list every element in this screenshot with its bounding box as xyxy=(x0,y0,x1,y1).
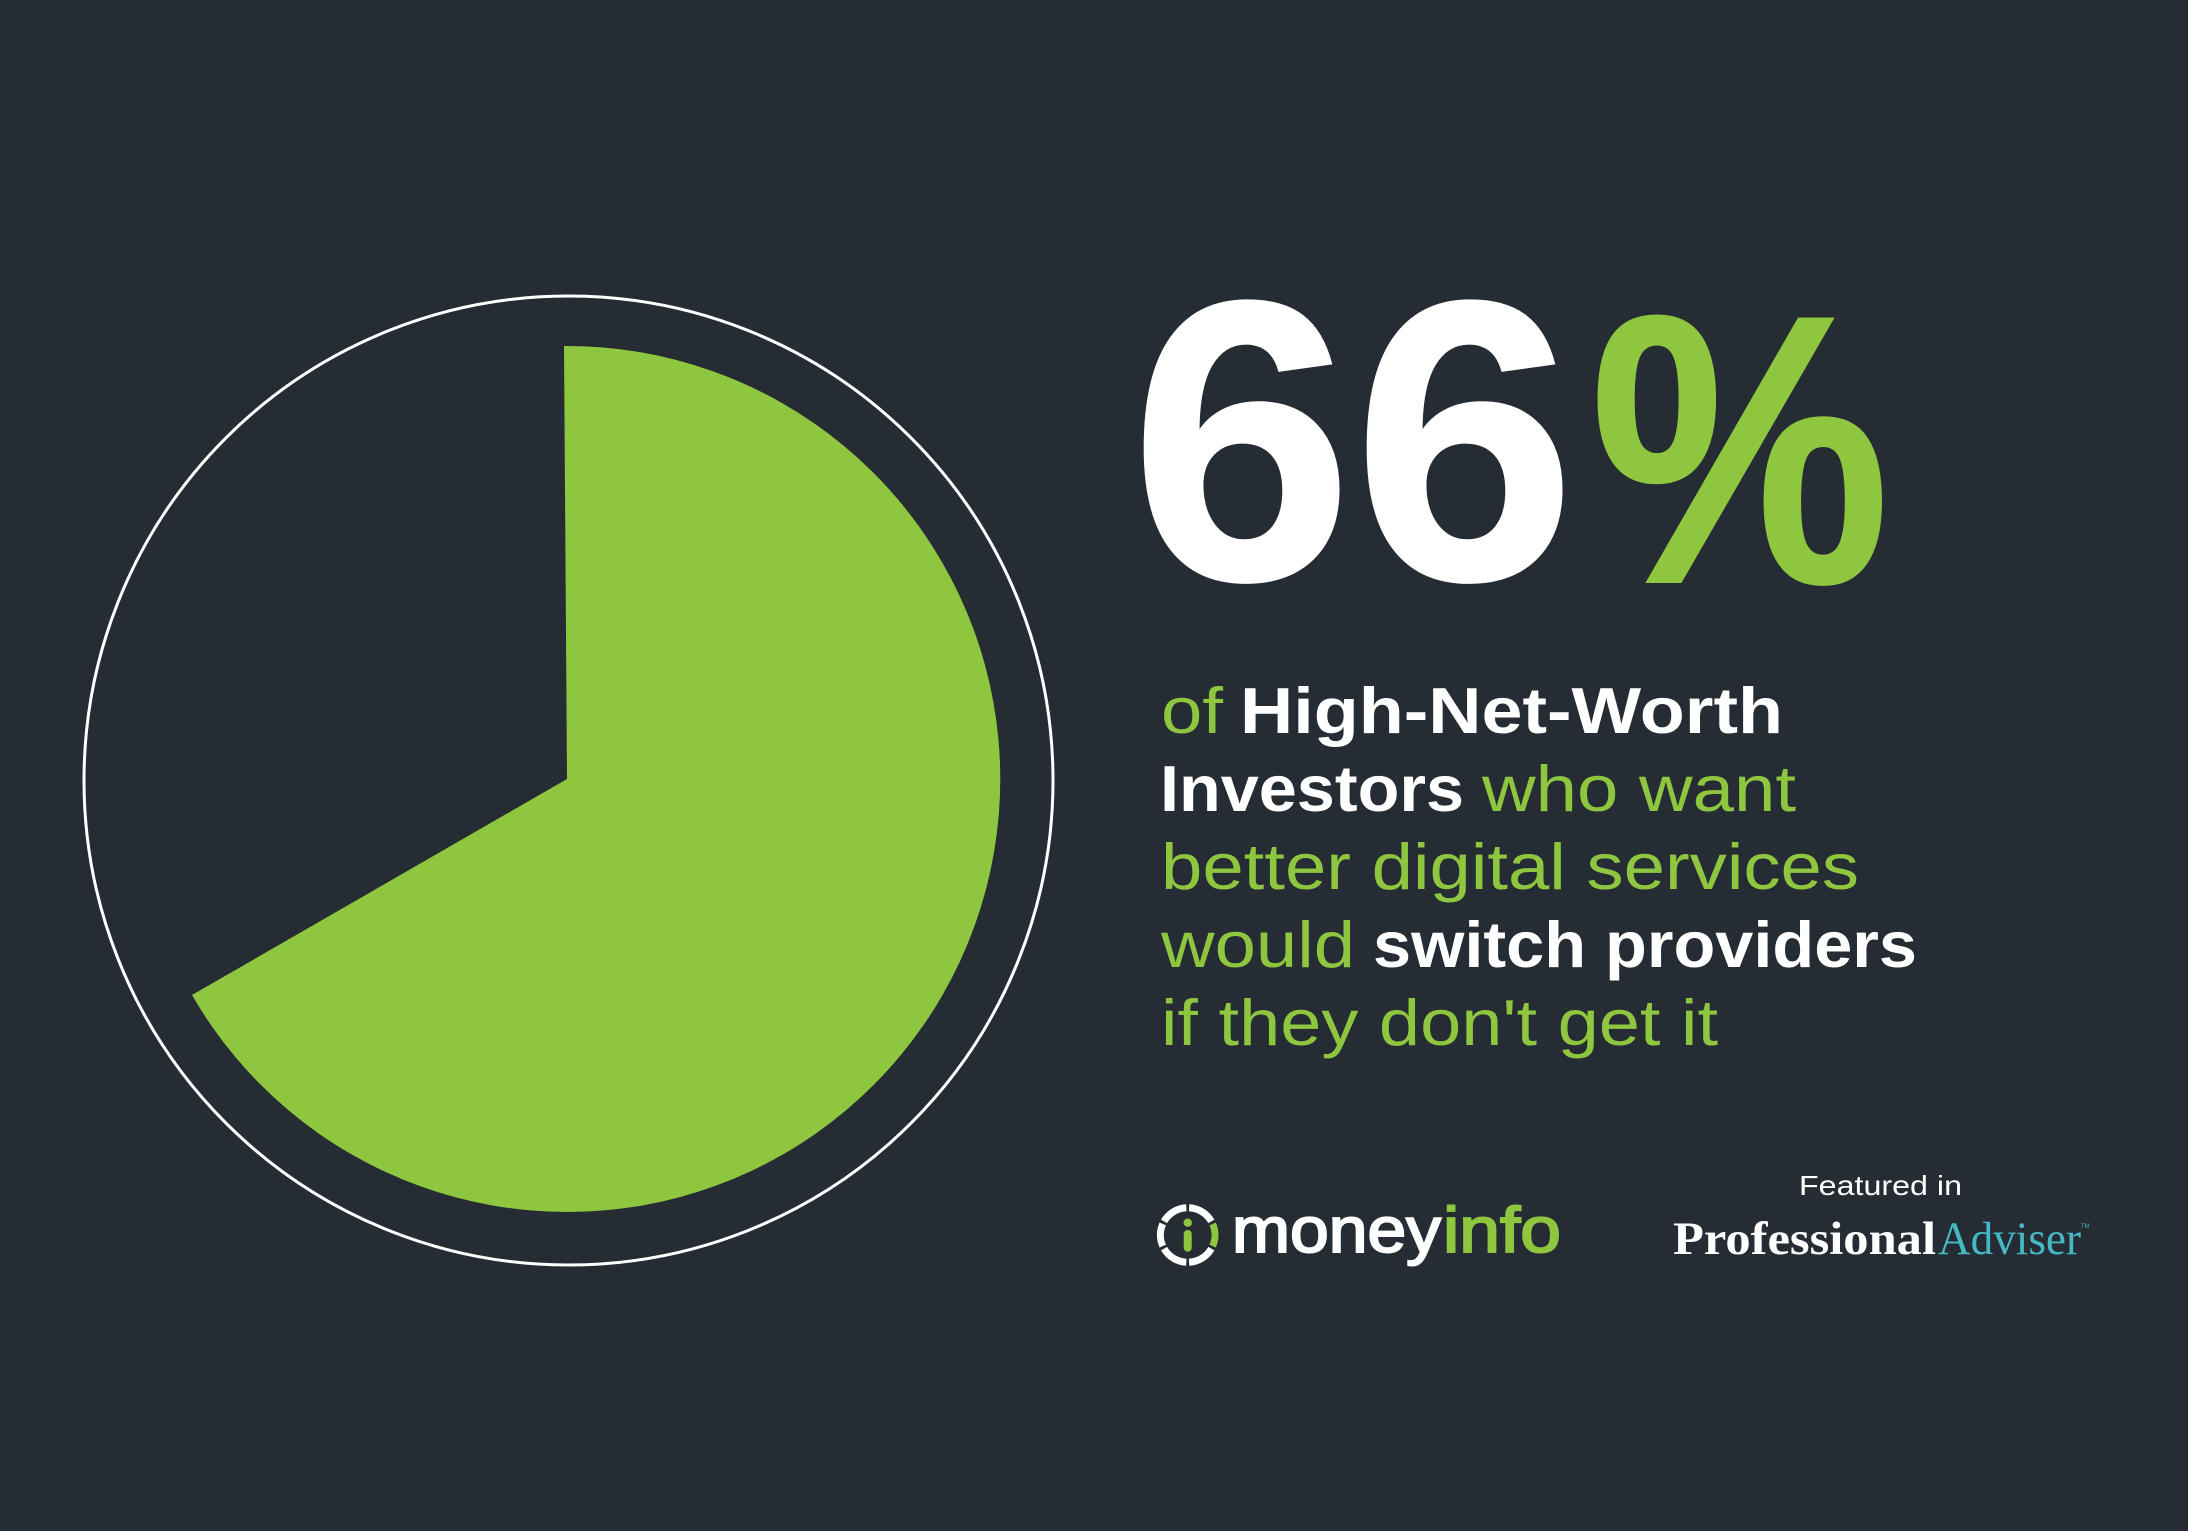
description text: Investors xyxy=(1160,752,1464,825)
Professional Adviser logo: TM xyxy=(2081,1224,2090,1230)
description text: would xyxy=(1160,908,1355,981)
chart outer ring xyxy=(84,296,1053,1265)
Professional Adviser logo xyxy=(1673,1213,2090,1265)
description text: High-Net-Worth xyxy=(1240,674,1783,747)
statistic percent sign: % xyxy=(1590,236,1890,664)
logo icon: segmented ring with letter i xyxy=(1152,1199,1224,1271)
description text xyxy=(1160,674,1917,1059)
description text: if they don't get it xyxy=(1161,986,1718,1059)
moneyinfo logo xyxy=(1152,1194,1561,1271)
featured in label: Featured in xyxy=(1799,1170,1962,1201)
Professional Adviser logo: Adviser xyxy=(1938,1213,2081,1265)
logo wordmark: info xyxy=(1443,1194,1561,1266)
pie chart: 66 percent xyxy=(84,296,1053,1265)
logo wordmark: money xyxy=(1232,1194,1441,1266)
description text: of xyxy=(1161,674,1224,747)
big statistic: 66% xyxy=(1130,218,1890,664)
Professional Adviser logo: Professional xyxy=(1673,1213,1936,1265)
description text: better digital services xyxy=(1161,830,1859,903)
pie slice: 66 percent xyxy=(192,346,1000,1212)
description text: who want xyxy=(1481,752,1796,825)
statistic digits: 66 xyxy=(1130,218,1576,664)
logo wordmark xyxy=(1232,1194,1561,1266)
description text: switch providers xyxy=(1373,908,1917,981)
